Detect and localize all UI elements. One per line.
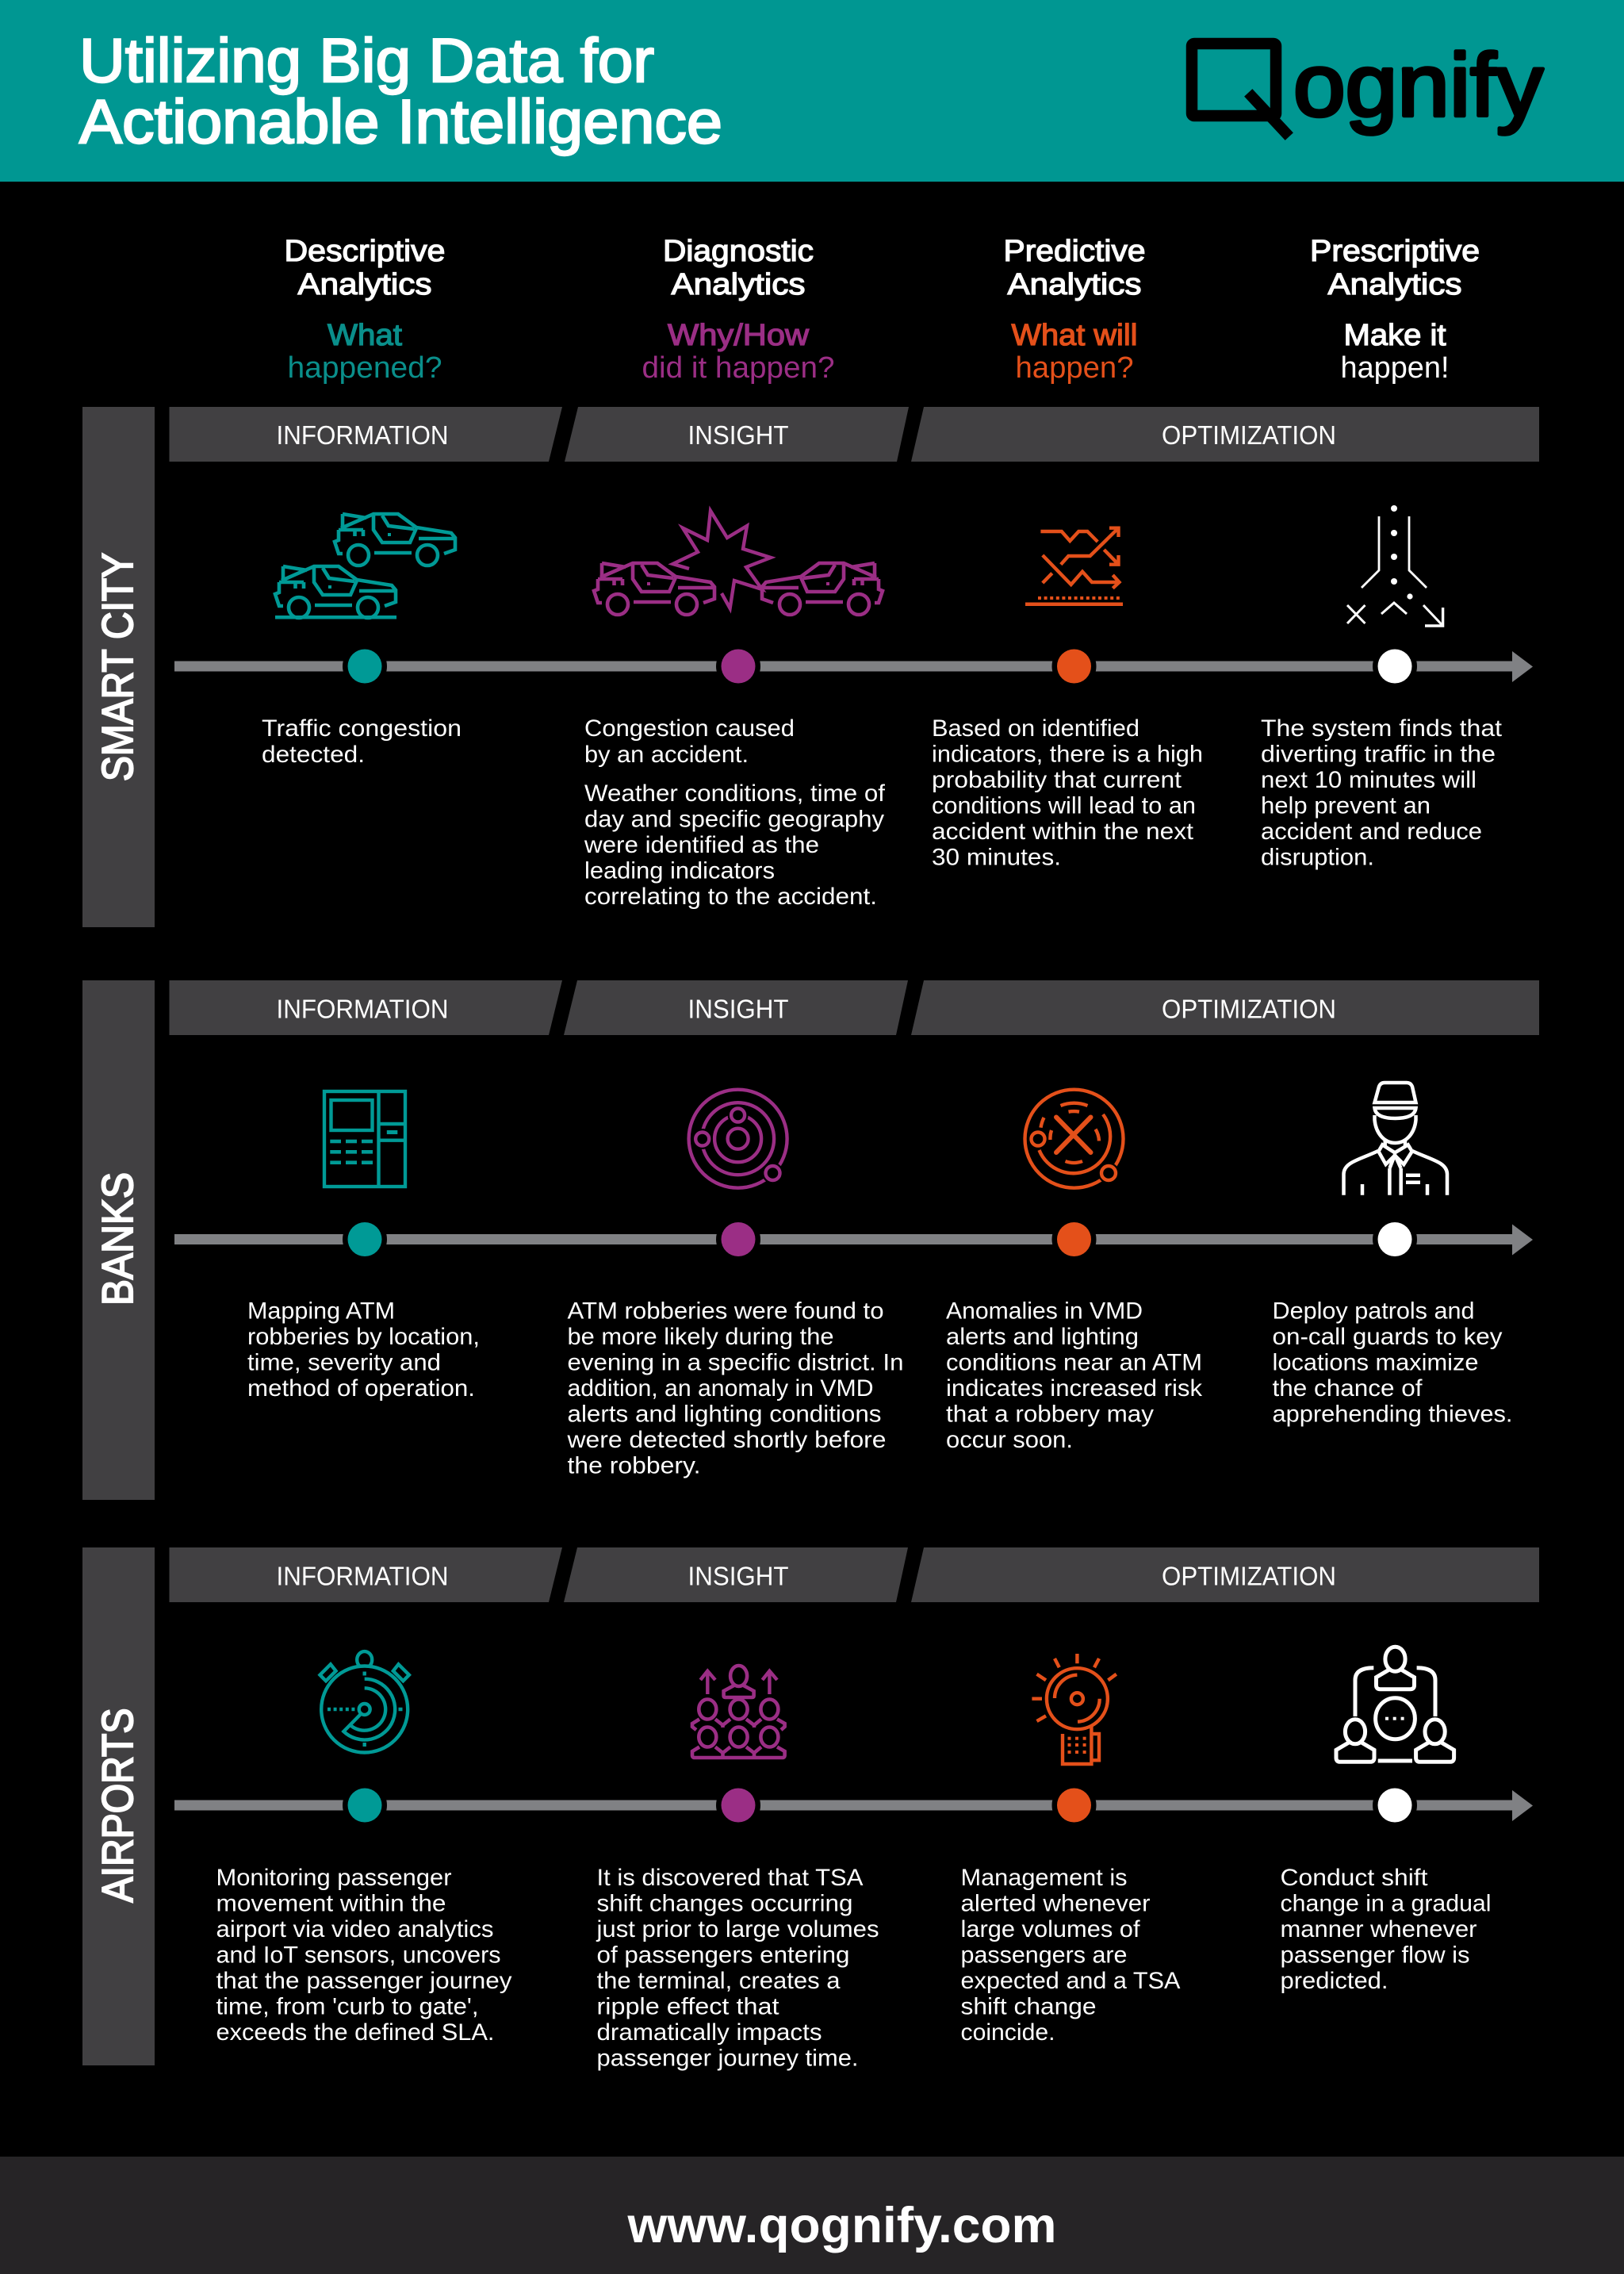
banner: optimization: OPTIMIZATION — [1162, 995, 1336, 1023]
banner: optimization — [911, 407, 1539, 462]
side label: smart city: SMART CITY — [93, 553, 142, 781]
text: ATM robbery patterns: were detected shortly before — [566, 1427, 887, 1453]
heading: predictive analytics — [1004, 235, 1145, 385]
icon: road diversion — [1347, 505, 1443, 626]
heading: descriptive analytics: happened? — [287, 351, 442, 385]
banner: information — [170, 1547, 562, 1602]
footer — [0, 2157, 1624, 2274]
text: system diverts traffic: next 10 minutes will — [1261, 767, 1477, 793]
title — [79, 25, 722, 156]
heading: prescriptive analytics: Prescriptive — [1310, 235, 1480, 268]
text: monitoring passenger movement: Monitoring passenger — [216, 1865, 452, 1891]
timeline: smart city — [174, 644, 1533, 688]
icon: ATM — [324, 1091, 405, 1187]
text: congestion caused by an accident: correlating to the accident. — [584, 884, 877, 910]
text: system diverts traffic: The system finds that — [1261, 715, 1503, 742]
text: monitoring passenger movement: that the passenger journey — [216, 1968, 512, 1994]
text: management alerted: large volumes of — [961, 1916, 1140, 1942]
text: mapping ATM robberies: method of operation. — [247, 1375, 475, 1402]
text: anomalies near ATM: indicates increased risk — [946, 1375, 1203, 1402]
text: traffic congestion detected: Traffic congestion — [262, 715, 462, 742]
text: management alerted: shift change — [961, 1994, 1096, 2019]
icon: team shift — [1336, 1647, 1454, 1762]
text: conduct shift change: change in a gradual — [1280, 1891, 1491, 1916]
text: high probability of accident — [932, 715, 1203, 871]
text: TSA shift changes — [596, 1865, 879, 2072]
heading: descriptive analytics: Descriptive — [284, 235, 446, 268]
banner: information — [170, 407, 562, 462]
text: congestion caused by an accident: leading indicators — [584, 858, 775, 884]
text: conduct shift change: predicted. — [1280, 1968, 1388, 1994]
heading: diagnostic analytics: Diagnostic — [663, 235, 814, 268]
heading: prescriptive analytics: Make it — [1343, 319, 1446, 352]
banner: information: INFORMATION — [276, 1561, 449, 1591]
heading: predictive analytics: Analytics — [1007, 268, 1142, 301]
banner: insight — [564, 980, 908, 1035]
text: high probability of accident: probability that current — [932, 767, 1182, 793]
text: high probability of accident: accident within the next — [932, 819, 1194, 845]
text: ATM robbery patterns: alerts and lighting conditions — [568, 1401, 882, 1428]
text: congestion caused by an accident: day and specific geography — [584, 806, 884, 833]
text: ATM robbery patterns: be more likely during the — [568, 1324, 834, 1350]
text: monitoring passenger movement: and IoT sensors, uncovers — [216, 1942, 501, 1969]
text: mapping ATM robberies: Mapping ATM — [247, 1298, 395, 1325]
text: ATM robbery patterns: ATM robberies were found to — [568, 1298, 883, 1325]
text: TSA shift changes: just prior to large volumes — [596, 1916, 879, 1942]
banner: optimization — [911, 980, 1539, 1035]
text: congestion caused by an accident: were identified as the — [584, 832, 819, 858]
text: management alerted: expected and a TSA — [961, 1968, 1180, 1994]
icon: crowd of passengers — [692, 1666, 785, 1758]
text: deploy patrols: the chance of — [1272, 1375, 1423, 1402]
banner: optimization — [911, 1547, 1539, 1602]
side label: airports: AIRPORTS — [93, 1708, 142, 1902]
text: anomalies near ATM: Anomalies in VMD — [946, 1298, 1143, 1325]
text: ATM robbery patterns — [566, 1298, 904, 1478]
text: management alerted: alerted whenever — [961, 1891, 1150, 1916]
heading: descriptive analytics: What — [327, 319, 402, 352]
text: ATM robbery patterns: the robbery. — [568, 1453, 701, 1478]
text: conduct shift change: passenger flow is — [1280, 1942, 1470, 1969]
banner: insight — [564, 1547, 908, 1602]
text: TSA shift changes: passenger journey time. — [596, 2045, 858, 2072]
text: conduct shift change: manner whenever — [1280, 1916, 1477, 1942]
text: management alerted — [961, 1865, 1180, 2046]
text: monitoring passenger movement: movement within the — [216, 1891, 446, 1916]
text: TSA shift changes: It is discovered that TSA — [596, 1865, 863, 1891]
banner: information: INFORMATION — [276, 995, 449, 1023]
text: anomalies near ATM: conditions near an ATM — [946, 1350, 1202, 1375]
panel: airports — [82, 1547, 1539, 2072]
icon: orbit with X anomaly — [1025, 1090, 1123, 1188]
icon: security guard — [1343, 1083, 1447, 1195]
heading: diagnostic analytics — [642, 235, 834, 385]
text: mapping ATM robberies — [247, 1298, 480, 1402]
column headings — [284, 235, 1480, 385]
text: traffic congestion detected: detected. — [262, 742, 365, 768]
text: TSA shift changes: the terminal, creates a — [596, 1968, 841, 1994]
text: congestion caused by an accident: by an accident. — [584, 742, 749, 768]
icon: stopwatch — [320, 1651, 409, 1753]
text: conduct shift change: Conduct shift — [1280, 1865, 1428, 1891]
heading: diagnostic analytics: Analytics — [671, 268, 806, 301]
text: ATM robbery patterns: addition, an anomaly in VMD — [568, 1375, 874, 1402]
icon: car collision — [594, 511, 883, 615]
heading: predictive analytics: Predictive — [1004, 235, 1145, 268]
text: system diverts traffic: diverting traffic in the — [1261, 741, 1496, 768]
banner: information: INFORMATION — [276, 420, 449, 450]
heading: prescriptive analytics — [1310, 235, 1480, 385]
text: congestion caused by an accident: Weather conditions, time of — [584, 780, 886, 807]
side label: airports — [82, 1547, 155, 2065]
text: conduct shift change — [1280, 1865, 1491, 1994]
banner: insight: INSIGHT — [688, 995, 788, 1023]
heading: descriptive analytics: Analytics — [298, 268, 431, 301]
timeline: airports — [174, 1783, 1533, 1827]
side label: banks: BANKS — [93, 1172, 142, 1306]
text: deploy patrols: Deploy patrols and — [1272, 1298, 1475, 1325]
icon: predictive trend lines — [1025, 528, 1123, 604]
text: anomalies near ATM: alerts and lighting — [946, 1324, 1139, 1350]
heading: diagnostic analytics: did it happen? — [642, 351, 834, 385]
text: TSA shift changes: ripple effect that — [596, 1994, 779, 2019]
banner: information — [170, 980, 562, 1035]
banner: insight: INSIGHT — [688, 1561, 788, 1591]
panel: smart city — [82, 407, 1539, 927]
timeline: banks — [174, 1217, 1533, 1261]
text: monitoring passenger movement: exceeds the defined SLA. — [216, 2019, 495, 2046]
panel: banks — [82, 980, 1539, 1500]
text: monitoring passenger movement: airport via video analytics — [216, 1916, 493, 1942]
heading: prescriptive analytics: happen! — [1340, 351, 1450, 385]
heading: descriptive analytics — [284, 235, 446, 385]
text: mapping ATM robberies: robberies by location, — [247, 1324, 480, 1350]
icon: alarm bell — [1032, 1654, 1116, 1764]
icon: orbit radar — [689, 1090, 787, 1188]
text: monitoring passenger movement: time, from 'curb to gate', — [216, 1994, 479, 2019]
footer: www.qognify.com — [626, 2198, 1056, 2253]
text: high probability of accident: Based on identified — [932, 715, 1139, 742]
text: deploy patrols: locations maximize — [1272, 1350, 1478, 1375]
title: Actionable Intelligence — [79, 86, 722, 156]
banner: optimization: OPTIMIZATION — [1162, 1561, 1336, 1591]
banner: insight: INSIGHT — [688, 420, 788, 450]
text: deploy patrols — [1272, 1298, 1513, 1428]
text: congestion caused by an accident: Congestion caused — [584, 715, 795, 742]
text: management alerted: coincide. — [961, 2019, 1055, 2046]
text: TSA shift changes: dramatically impacts — [596, 2019, 822, 2046]
heading: prescriptive analytics: Analytics — [1327, 268, 1462, 301]
text: deploy patrols: on-call guards to key — [1272, 1324, 1502, 1350]
text: system diverts traffic: disruption. — [1261, 844, 1374, 871]
text: anomalies near ATM: occur soon. — [946, 1427, 1073, 1453]
text: anomalies near ATM: that a robbery may — [946, 1401, 1154, 1428]
logo: Qognify: ognify — [1293, 36, 1543, 135]
text: system diverts traffic — [1261, 715, 1503, 871]
side label: smart city — [82, 407, 155, 927]
text: TSA shift changes: shift changes occurring — [596, 1891, 853, 1916]
heading: predictive analytics: happen? — [1015, 351, 1134, 385]
header band — [0, 0, 1624, 182]
text: high probability of accident: 30 minutes. — [932, 844, 1061, 871]
text: management alerted: passengers are — [961, 1942, 1128, 1969]
banner: insight — [565, 407, 909, 462]
banner: optimization: OPTIMIZATION — [1162, 420, 1336, 450]
icon: two cars in traffic — [275, 514, 455, 619]
text: high probability of accident: conditions will lead to an — [932, 793, 1196, 819]
text: deploy patrols: apprehending thieves. — [1272, 1401, 1513, 1428]
text: management alerted: Management is — [961, 1865, 1128, 1891]
text: congestion caused by an accident — [584, 715, 886, 910]
logo: Qognify — [1192, 36, 1543, 135]
text: mapping ATM robberies: time, severity and — [247, 1350, 441, 1375]
text: ATM robbery patterns: evening in a specific district. In — [568, 1350, 904, 1375]
text: monitoring passenger movement — [216, 1865, 512, 2046]
text: system diverts traffic: accident and reduce — [1261, 819, 1482, 845]
text: anomalies near ATM — [946, 1298, 1203, 1453]
title: Utilizing Big Data for — [79, 25, 654, 95]
heading: predictive analytics: What will — [1012, 319, 1137, 352]
heading: diagnostic analytics: Why/How — [668, 319, 810, 352]
text: system diverts traffic: help prevent an — [1261, 793, 1431, 819]
text: high probability of accident: indicators, there is a high — [932, 741, 1203, 768]
text: TSA shift changes: of passengers entering — [596, 1942, 850, 1969]
text: traffic congestion detected — [262, 715, 462, 768]
side label: banks — [82, 980, 155, 1500]
